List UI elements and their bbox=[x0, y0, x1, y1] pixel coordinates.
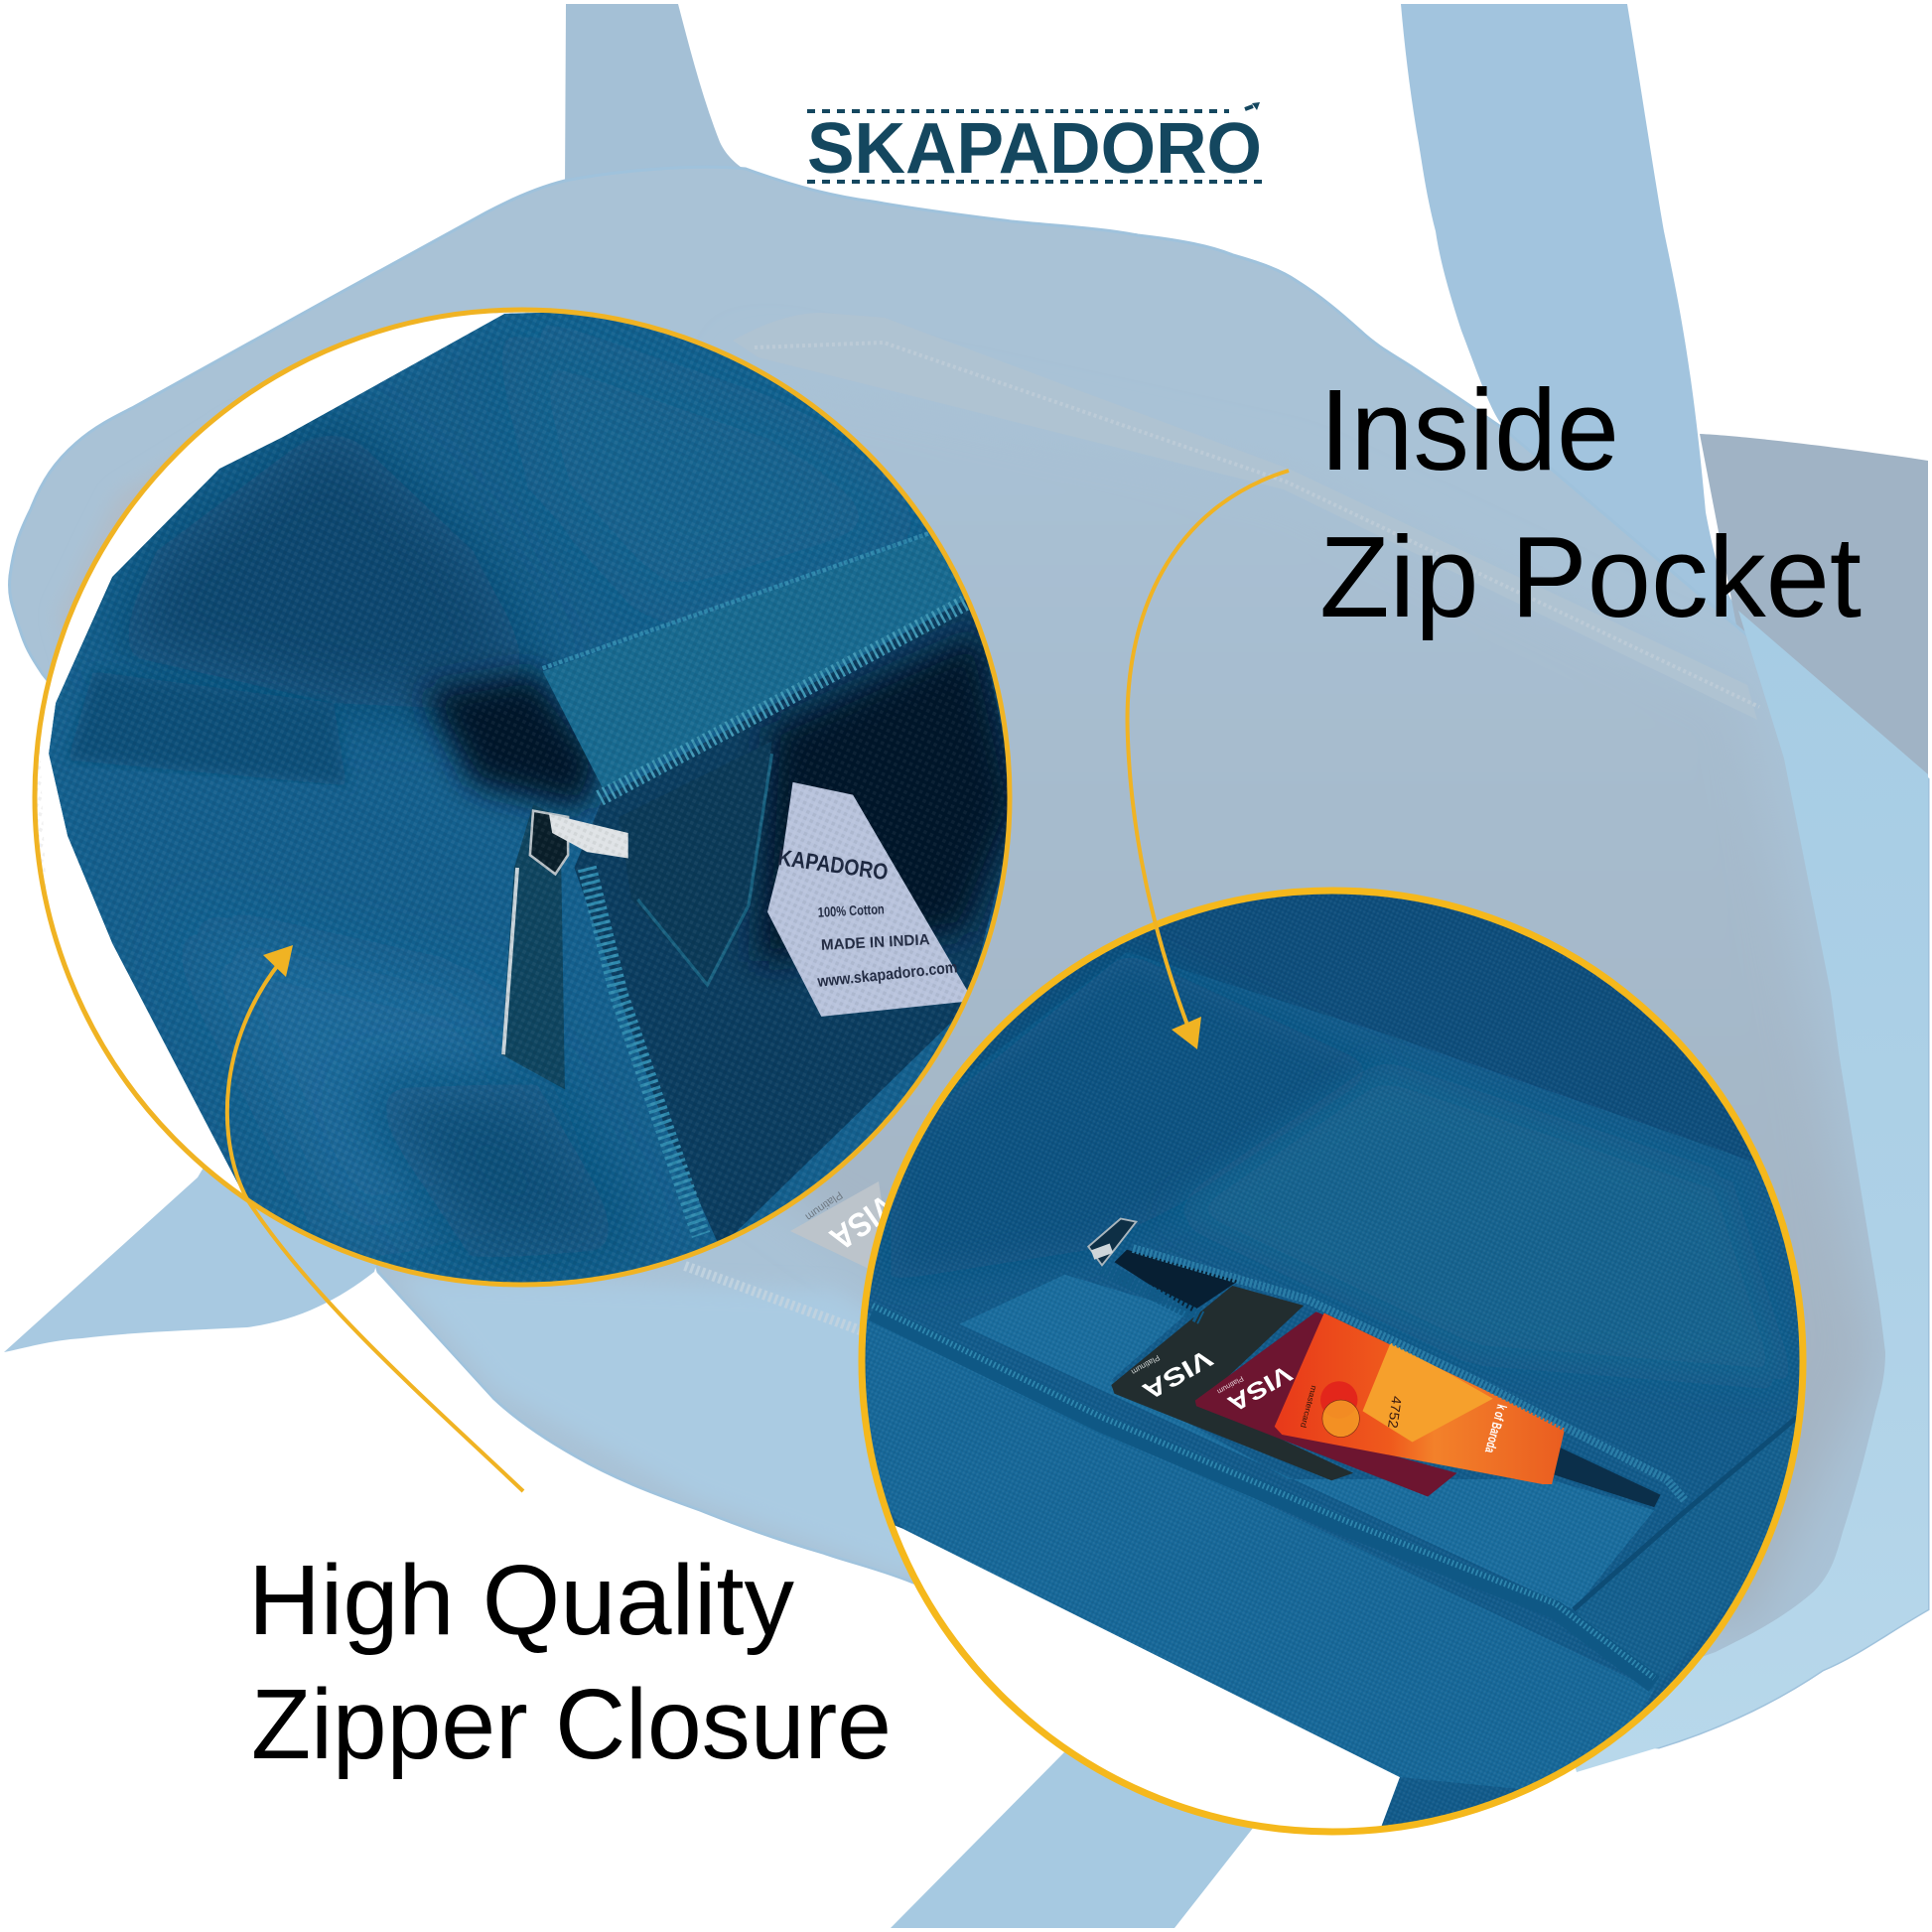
zoom circle: inside zip pocket: VISA bbox=[1138, 1343, 1217, 1406]
bag: lower left strap bbox=[4, 1092, 397, 1352]
pocket lighter front bbox=[959, 1275, 1654, 1609]
inner dark pocket bbox=[575, 596, 1018, 1248]
lighter centre bbox=[1211, 1086, 1746, 1355]
zoom circle: high quality zipper closure: www.skapadoro.com bbox=[816, 959, 958, 991]
zip tape bbox=[543, 535, 973, 788]
maroon card bbox=[1195, 1311, 1457, 1497]
pocket opening shadow bbox=[1114, 1250, 1239, 1311]
zoom circle: high quality zipper closure: KAPADORO bbox=[776, 844, 890, 885]
zoom circle: inside zip pocket: 4752 bbox=[1385, 1395, 1404, 1429]
zoom circle: high quality zipper closure: 100% Cotton bbox=[817, 900, 885, 920]
bag: handle right rear bbox=[1401, 4, 1747, 655]
fold triangle bbox=[620, 741, 772, 943]
ring: circle 2 bbox=[862, 891, 1803, 1832]
logo: SKAPADORO bbox=[807, 109, 1262, 189]
faded card under the pocket: Platinum bbox=[803, 1188, 845, 1223]
zoom circle: inside zip pocket: Platinum bbox=[1215, 1374, 1245, 1396]
faded card under the pocket: VISA bbox=[823, 1186, 901, 1258]
zip teeth lower bbox=[587, 868, 701, 1235]
zoom circle: inside zip pocket: k of Baroda bbox=[1482, 1403, 1509, 1454]
zip slider bbox=[549, 814, 628, 858]
dark top band bbox=[961, 894, 1755, 1162]
bag: handle left rear bbox=[565, 4, 746, 189]
heading: inside zip pocket: Zip Pocket bbox=[1319, 512, 1862, 641]
orange card bbox=[1275, 1312, 1565, 1484]
heading: high quality zipper closure: High Quality bbox=[248, 1545, 794, 1656]
mastercard logo bbox=[1299, 1381, 1359, 1438]
arrow: zipper closure callout bbox=[227, 945, 523, 1491]
black card bbox=[1111, 1286, 1353, 1480]
zoom circle: high quality zipper closure bbox=[30, 298, 1033, 1311]
lower left fabric bbox=[111, 941, 238, 1185]
pocket zip teeth bbox=[1133, 1249, 1686, 1501]
white gap behind zoom circle 1 bbox=[35, 310, 1010, 1285]
mastercard logo: mastercard bbox=[1299, 1384, 1318, 1429]
zip pull bbox=[501, 804, 565, 1089]
heading: high quality zipper closure: Zipper Closure bbox=[251, 1669, 892, 1780]
bag: zip band on back wall bbox=[733, 313, 1759, 720]
heading: high quality zipper closure bbox=[248, 1545, 892, 1780]
zoom circle: inside zip pocket: VISA bbox=[1223, 1359, 1297, 1418]
faded card under the pocket bbox=[790, 1181, 901, 1281]
fabric label bbox=[767, 782, 973, 1017]
small zip pull bbox=[1088, 1219, 1136, 1265]
long zipper bbox=[873, 1311, 1654, 1684]
bag: back panel right bbox=[1700, 434, 1928, 784]
zoom circle: inside zip pocket: Platinum bbox=[1130, 1353, 1162, 1377]
zoom circle: inside zip pocket bbox=[858, 888, 1807, 1835]
lower bag fabric bbox=[866, 1311, 1654, 1796]
bag: grey interior shading bbox=[60, 357, 1876, 1628]
deep shadow by the zip bbox=[422, 671, 603, 811]
ring: circle 1 bbox=[35, 310, 1010, 1285]
zip teeth upper bbox=[600, 602, 967, 798]
bag: zip line near lower body bbox=[685, 1266, 953, 1380]
fabric interior bbox=[49, 298, 1033, 1311]
upper wall shading bbox=[112, 330, 929, 703]
zoom circle: high quality zipper closure: MADE IN INDIA bbox=[821, 931, 930, 954]
left band bbox=[68, 671, 346, 785]
bag: lower strap outside pocket circle bbox=[891, 1752, 1254, 1928]
arrow: inside zip pocket callout bbox=[1128, 471, 1289, 1049]
weave on fabric only bbox=[842, 872, 1847, 1876]
heading: inside zip pocket: Inside bbox=[1319, 365, 1619, 494]
white wedge trimming outside the fabric in circle 1 bbox=[40, 314, 504, 1193]
pocket wall fabric bbox=[866, 951, 1799, 1826]
bag: right strap foreground bbox=[1559, 611, 1928, 1772]
heading: inside zip pocket bbox=[1319, 365, 1862, 641]
